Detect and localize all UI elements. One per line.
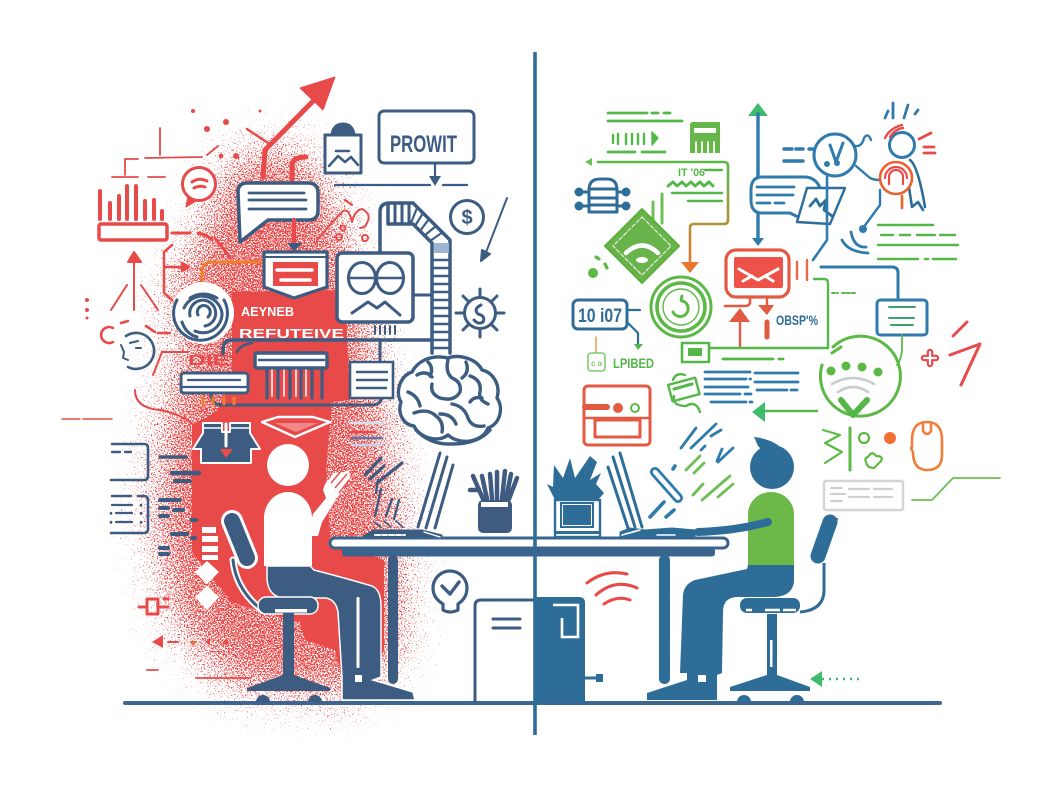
person left xyxy=(232,444,415,702)
icon: lightbulb with check xyxy=(433,571,467,612)
label: LPIBED with small box: LPIBED xyxy=(613,355,654,371)
red connector symbol xyxy=(139,599,168,614)
motion strokes blue and green xyxy=(681,424,733,500)
red dots xyxy=(85,109,262,320)
green stepped line xyxy=(912,478,1000,500)
arrow: rising red arrow xyxy=(247,77,335,180)
panel: gray text box xyxy=(824,481,903,510)
shoe notch xyxy=(355,675,362,682)
orange connector xyxy=(202,262,260,283)
arrow: red left arrow with dots xyxy=(152,635,228,648)
icon: red shield box xyxy=(264,252,327,298)
label: OBSP%: OBSP'% xyxy=(776,312,818,328)
red curving line xyxy=(135,352,200,433)
legs right xyxy=(647,565,794,700)
right idea cluster xyxy=(573,103,1000,604)
hand left xyxy=(323,470,350,503)
red connector lines xyxy=(112,128,218,177)
red baseline dashes xyxy=(147,670,250,678)
green header lines xyxy=(608,113,682,152)
panel: red window icon xyxy=(584,386,650,445)
green data block: IT '06 xyxy=(678,167,705,179)
head right xyxy=(750,445,794,489)
shoe notch xyxy=(698,675,706,682)
green connector to orange arrow xyxy=(585,158,728,273)
left idea cluster xyxy=(62,77,507,678)
hair xyxy=(754,437,789,458)
hatched motion strokes xyxy=(365,458,403,527)
leg gap xyxy=(356,597,360,668)
icon: orange mouse xyxy=(911,422,942,470)
label: AEYNEB: AEYNEB xyxy=(241,305,294,319)
callout: PROWIT sign: PROWIT xyxy=(390,131,457,158)
seat stripes xyxy=(746,609,796,611)
legs left xyxy=(267,566,415,700)
icon: dollar coin xyxy=(450,200,484,234)
arrow: green floor arrow xyxy=(810,671,862,687)
document icon xyxy=(350,362,393,398)
arrow: thin diagonal xyxy=(481,198,507,261)
icon: check circle with dots xyxy=(820,336,900,416)
icon: green tag xyxy=(668,374,700,412)
plant holder right xyxy=(547,456,604,537)
seat right xyxy=(740,598,800,613)
callout: 10 i07 xyxy=(573,300,643,350)
icon: face box with worried eyes xyxy=(337,253,413,322)
red dashed connector xyxy=(172,233,230,257)
icon: smiling face xyxy=(101,321,170,369)
red branch bracket xyxy=(164,245,189,300)
arrow: red down xyxy=(758,297,774,337)
icon: dollar coin: $ xyxy=(461,207,473,229)
circuit tray with comb legs: BOUT xyxy=(268,341,319,357)
green connector box xyxy=(682,279,856,362)
green torso xyxy=(748,492,794,566)
laptop left xyxy=(362,453,453,537)
person right xyxy=(647,437,837,702)
icon: gear swirl xyxy=(456,289,504,337)
blue dashes in speckle xyxy=(160,457,199,554)
seat left xyxy=(258,597,318,614)
label: LPIBED with small box xyxy=(588,337,654,371)
white garbled text band: REFUTEIVE xyxy=(239,326,344,341)
icon: upload house arrows xyxy=(193,423,260,463)
label: LPIBED with small box: c a xyxy=(591,359,603,368)
stool left xyxy=(247,613,330,691)
icon cluster under check circle xyxy=(823,428,882,470)
center divider xyxy=(533,52,537,735)
stem highlight xyxy=(770,640,772,667)
wheels left xyxy=(256,695,322,702)
red garbled label: DIET xyxy=(188,352,244,369)
device bar with keys xyxy=(181,373,248,404)
icon: clock xyxy=(784,134,880,180)
bar chart: red xyxy=(99,186,167,240)
chair backrest xyxy=(818,522,830,556)
pen holder left xyxy=(470,471,517,533)
arm right xyxy=(698,522,768,532)
text lines center right xyxy=(705,359,798,402)
red speckled background: left side xyxy=(145,140,410,705)
icon: green floppy xyxy=(690,122,720,153)
icon: red wifi waves xyxy=(587,573,637,604)
circuit tray with comb legs xyxy=(211,340,432,405)
arrow: red up xyxy=(729,308,750,346)
icon: bag with mountain xyxy=(325,124,361,173)
red dashes xyxy=(62,418,112,420)
icon: red chat bubble xyxy=(182,168,216,207)
red connector and triangle xyxy=(287,220,303,251)
green text lines right xyxy=(878,225,958,259)
white garbled text band xyxy=(239,326,395,341)
white comb and diamonds xyxy=(195,527,219,610)
filing cabinet: white half xyxy=(475,600,535,702)
filing cabinet: blue half xyxy=(535,597,603,703)
hand stripes xyxy=(331,470,349,493)
speckle status lines xyxy=(350,423,382,445)
figure: stressed person with signals xyxy=(813,103,935,260)
green dots xyxy=(588,257,607,278)
arrow: green left xyxy=(752,402,817,422)
icon: left list box xyxy=(111,496,148,533)
arrow: red up arrow xyxy=(111,252,158,310)
icon: red envelope xyxy=(725,250,807,306)
torso left xyxy=(264,492,336,566)
icon: fingerprint spiral xyxy=(172,282,234,344)
head left xyxy=(267,444,309,486)
desk xyxy=(330,538,728,684)
chair right xyxy=(800,518,837,612)
icon: red squiggle with circles xyxy=(317,200,369,241)
icon: white outlined diamond xyxy=(262,417,330,437)
icon: roller brush xyxy=(650,466,678,517)
panel: blue note box xyxy=(821,267,927,365)
icon: blue server bug xyxy=(576,179,629,212)
icon: speech bubble with lines xyxy=(238,183,318,242)
stool right xyxy=(730,614,810,691)
callout: PROWIT sign xyxy=(335,111,474,186)
pipe with ladder rungs xyxy=(380,203,450,353)
green ticks xyxy=(653,194,662,223)
icon: tablet with chart xyxy=(797,188,845,224)
red plus xyxy=(924,352,936,364)
icon: left panel box xyxy=(111,444,148,480)
ground line xyxy=(125,701,940,705)
icon: green target swirl xyxy=(651,277,711,337)
green data block xyxy=(668,167,722,201)
orange dot xyxy=(884,432,896,444)
callout: 10 i07: 10 i07 xyxy=(578,306,622,327)
wheels right xyxy=(737,695,804,702)
icon: blue chat bubble xyxy=(751,177,820,218)
red seven mark xyxy=(950,322,980,385)
icon: brain xyxy=(398,356,500,444)
seat stripe xyxy=(275,609,307,612)
icon: green diamond signal xyxy=(605,209,679,283)
chair left xyxy=(232,521,262,610)
laptop right xyxy=(608,453,695,537)
arrow: double-headed blue vertical xyxy=(748,103,768,246)
